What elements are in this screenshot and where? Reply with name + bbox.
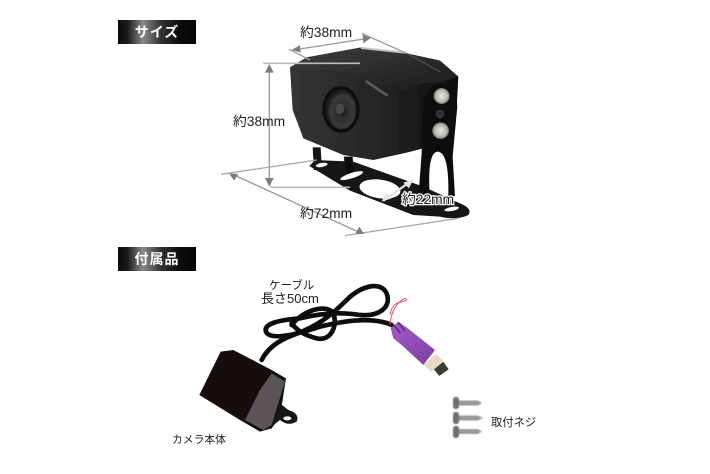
small camera body bbox=[199, 350, 297, 432]
red wire bbox=[390, 298, 407, 325]
camera with dimensions bbox=[221, 33, 470, 236]
cable bbox=[262, 286, 449, 376]
cable loops bbox=[262, 286, 392, 360]
label: cable: ケーブル bbox=[269, 278, 314, 292]
heading: accessories bbox=[118, 247, 196, 271]
purple connector bbox=[391, 322, 449, 376]
label: mounting screws: 取付ネジ bbox=[491, 416, 536, 429]
screw 3 bbox=[453, 426, 482, 438]
label: bracket 22mm: 約22mm bbox=[402, 192, 454, 207]
screws bbox=[453, 397, 483, 438]
heading: size bbox=[118, 20, 196, 44]
label: cable length: 長さ50cm bbox=[261, 291, 319, 306]
camera lens bbox=[322, 86, 360, 133]
camera top ridge highlights bbox=[362, 48, 440, 95]
label: depth 72mm: 約72mm bbox=[300, 206, 352, 221]
dimension lines bbox=[221, 33, 458, 236]
screw 1 bbox=[453, 397, 482, 409]
dimension arrowheads bbox=[229, 35, 413, 234]
heading: accessories: 付属品 bbox=[134, 251, 180, 267]
screw 2 bbox=[453, 412, 483, 424]
heading: size: サイズ bbox=[135, 24, 179, 40]
small camera lit side bbox=[245, 373, 285, 430]
mounting bracket with bolts bbox=[418, 83, 457, 198]
label: camera body: カメラ本体 bbox=[172, 432, 226, 446]
label: height 38mm: 約38mm bbox=[233, 114, 285, 129]
camera bracket plate bbox=[309, 147, 470, 218]
camera body bbox=[290, 48, 458, 160]
label: width 38mm: 約38mm bbox=[300, 25, 352, 40]
camera top face bbox=[290, 48, 458, 95]
small camera tab bbox=[272, 403, 297, 427]
